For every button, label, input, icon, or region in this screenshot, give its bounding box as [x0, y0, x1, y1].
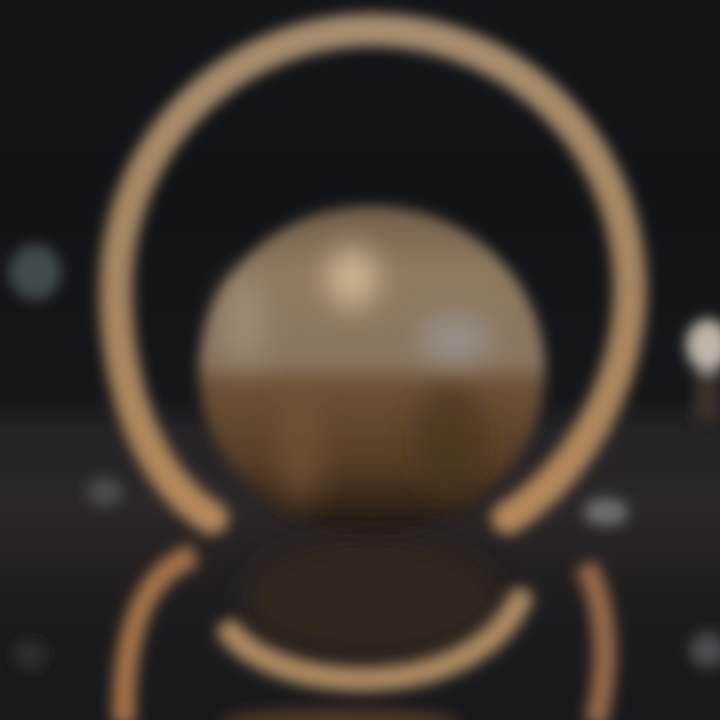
reflection of ring: left arc — [124, 555, 195, 720]
orb: left — [9, 244, 61, 300]
orb: right — [686, 319, 720, 422]
reflection of sphere — [240, 540, 500, 660]
reflection below central arc — [220, 708, 460, 720]
reflection: central arc — [230, 600, 520, 679]
bokeh lights — [14, 478, 720, 669]
sphere highlights — [223, 248, 491, 505]
sphere — [199, 206, 545, 534]
ring — [116, 30, 630, 518]
reflection of ring: right arc — [585, 565, 605, 720]
